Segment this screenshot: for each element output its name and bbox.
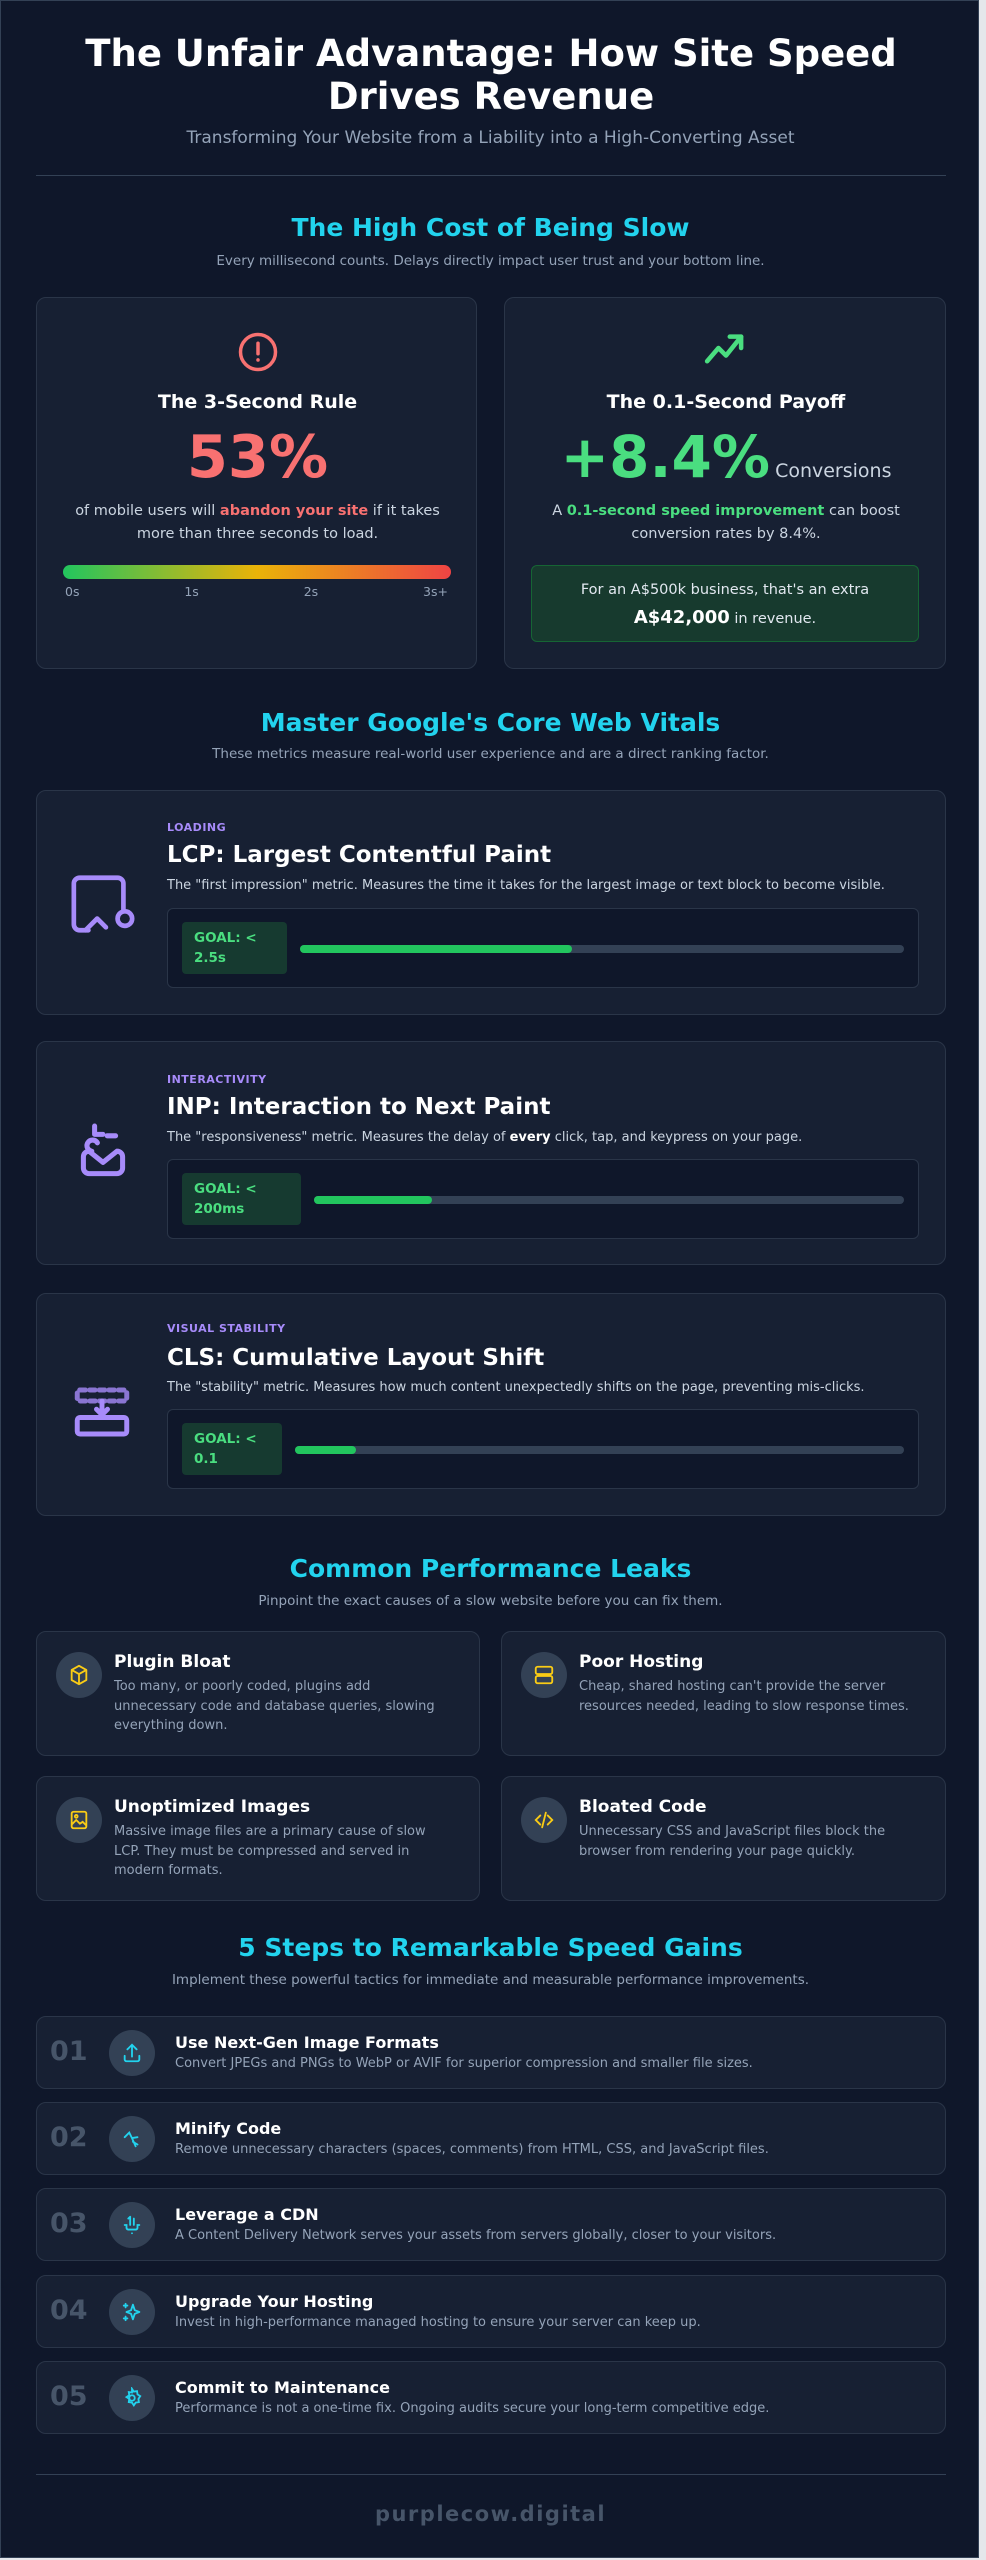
section subtitle: Pinpoint the exact causes of a slow website before you can fix them. [258, 1593, 723, 1609]
footer brand: purplecow.digital [375, 2502, 606, 2526]
label: LOADING [167, 821, 226, 834]
panel: 0.1-second payoff [504, 297, 946, 669]
bar labels [65, 584, 448, 599]
description: A 0.1-second speed improvement can boost conversion rates by 8.4%. [552, 503, 900, 542]
panel: 3-second rule [36, 297, 477, 669]
step 04: Invest in high-performance managed hosting to ensure your server can keep up. [175, 2315, 701, 2330]
step 03: Leverage a CDN [175, 2205, 319, 2224]
icon: gear [109, 2375, 155, 2421]
stat 53%: 53% [187, 422, 328, 491]
step 04 [36, 2275, 946, 2348]
description: The "responsiveness" metric. Measures the delay of every click, tap, and keypress on your page. [167, 1130, 802, 1145]
callout: revenue: For an A$500k business, that's an extra [581, 582, 869, 598]
panel: bloated code: Bloated Code [579, 1797, 707, 1817]
icon: alert [238, 332, 278, 372]
step 04: Upgrade Your Hosting [175, 2292, 373, 2311]
section heading: 5 steps: 5 Steps to Remarkable Speed Gains [238, 1933, 743, 1962]
icon: sparkles [109, 2289, 155, 2335]
section subtitle: Implement these powerful tactics for immediate and measurable performance improvements. [172, 1972, 809, 1988]
icon: cdn [109, 2202, 155, 2248]
step 01: Convert JPEGs and PNGs to WebP or AVIF for superior compression and smaller file sizes. [175, 2056, 753, 2071]
goal bar [167, 1159, 919, 1239]
step 02: 02 [50, 2122, 88, 2153]
step 04: 04 [50, 2295, 88, 2326]
section heading: leaks: Common Performance Leaks [290, 1554, 691, 1583]
step 02: Remove unnecessary characters (spaces, comments) from HTML, CSS, and JavaScript files. [175, 2142, 769, 2157]
step 02: Minify Code [175, 2119, 281, 2138]
icon: image load [72, 875, 134, 933]
bar labels: 1s [184, 584, 199, 599]
heading: CLS: Cumulative Layout Shift [167, 1345, 544, 1371]
bar labels: 2s [304, 584, 318, 599]
heading: LCP: Largest Contentful Paint [167, 842, 551, 868]
step 03: 03 [50, 2208, 88, 2239]
description: of mobile users will abandon your site if it takes more than three seconds to load. [75, 503, 440, 542]
icon: layout shift [74, 1388, 130, 1436]
section subtitle: These metrics measure real-world user experience and are a direct ranking factor. [212, 746, 769, 762]
stat +8.4%: +8.4% Conversions [560, 423, 891, 491]
panel: unoptimized images: Unoptimized Images [114, 1797, 310, 1817]
step 05: Commit to Maintenance [175, 2378, 390, 2397]
heading: INP: Interaction to Next Paint [167, 1094, 550, 1120]
step 05 [36, 2361, 946, 2434]
step 05: Performance is not a one-time fix. Ongoing audits secure your long-term competitive edge. [175, 2401, 769, 2416]
label: INTERACTIVITY [167, 1073, 267, 1086]
step 02 [36, 2102, 946, 2175]
bar labels: 3s+ [423, 584, 448, 599]
icon: image [56, 1797, 102, 1843]
icon: server [521, 1652, 567, 1698]
gradient bar [63, 565, 451, 579]
panel: LCP [36, 790, 946, 1015]
panel: poor hosting: Cheap, shared hosting can't provide the server resources needed, leading to slow response times. [579, 1679, 909, 1714]
description: The "first impression" metric. Measures the time it takes for the largest image or text block to become visible. [167, 878, 885, 893]
title: The Unfair Advantage: How Site Speed Drives Revenue [85, 32, 897, 118]
goal bar: 0.1 [194, 1451, 218, 1467]
panel: unoptimized images: Massive image files are a primary cause of slow LCP. They must be compressed and served in modern formats. [114, 1824, 426, 1878]
goal bar: GOAL: < [194, 1431, 257, 1447]
icon: tap [80, 1124, 126, 1176]
panel: plugin bloat: Plugin Bloat [114, 1652, 230, 1672]
goal bar: GOAL: < [194, 930, 257, 946]
panel: plugin bloat: Too many, or poorly coded, plugins add unnecessary code and database queries, slowing everything down. [114, 1679, 435, 1733]
callout: revenue: A$42,000 in revenue. [634, 607, 816, 628]
bar labels: 0s [65, 584, 79, 599]
step 01: 01 [50, 2036, 88, 2067]
step 03 [36, 2188, 946, 2261]
step 05: 05 [50, 2381, 88, 2412]
panel: poor hosting: Poor Hosting [579, 1652, 703, 1672]
step 01: Use Next-Gen Image Formats [175, 2033, 439, 2052]
panel: bloated code: Unnecessary CSS and JavaScript files block the browser from rendering your page quickly. [579, 1824, 885, 1858]
goal bar: 2.5s [194, 950, 226, 966]
panel: INP [36, 1041, 946, 1265]
goal bar [167, 908, 919, 988]
icon: upload [109, 2030, 155, 2076]
panel: unoptimized images [36, 1776, 480, 1901]
goal bar [167, 1409, 919, 1489]
section heading: core web vitals: Master Google's Core Web Vitals [261, 708, 720, 737]
step 03: A Content Delivery Network serves your assets from servers globally, closer to your visitors. [175, 2228, 776, 2243]
section subtitle: Every millisecond counts. Delays directly impact user trust and your bottom line. [216, 253, 765, 269]
icon: cube [56, 1652, 102, 1698]
subtitle: Transforming Your Website from a Liability into a High-Converting Asset [186, 128, 794, 148]
panel: plugin bloat [36, 1631, 480, 1756]
section heading: cost of slow: The High Cost of Being Slow [291, 213, 690, 242]
icon: code [521, 1797, 567, 1843]
panel: poor hosting [501, 1631, 946, 1756]
heading: The 0.1-Second Payoff [607, 391, 845, 413]
panel: CLS [36, 1293, 946, 1516]
goal bar: 200ms [194, 1201, 244, 1217]
label: VISUAL STABILITY [167, 1322, 286, 1335]
callout: revenue [531, 565, 919, 642]
description: The "stability" metric. Measures how much content unexpectedly shifts on the page, preventing mis-clicks. [167, 1380, 865, 1395]
step 01 [36, 2016, 946, 2089]
panel: bloated code [501, 1776, 946, 1901]
icon: minify [109, 2116, 155, 2162]
goal bar: GOAL: < [194, 1181, 257, 1197]
heading: The 3-Second Rule [158, 391, 357, 413]
icon: trending up [704, 334, 744, 364]
